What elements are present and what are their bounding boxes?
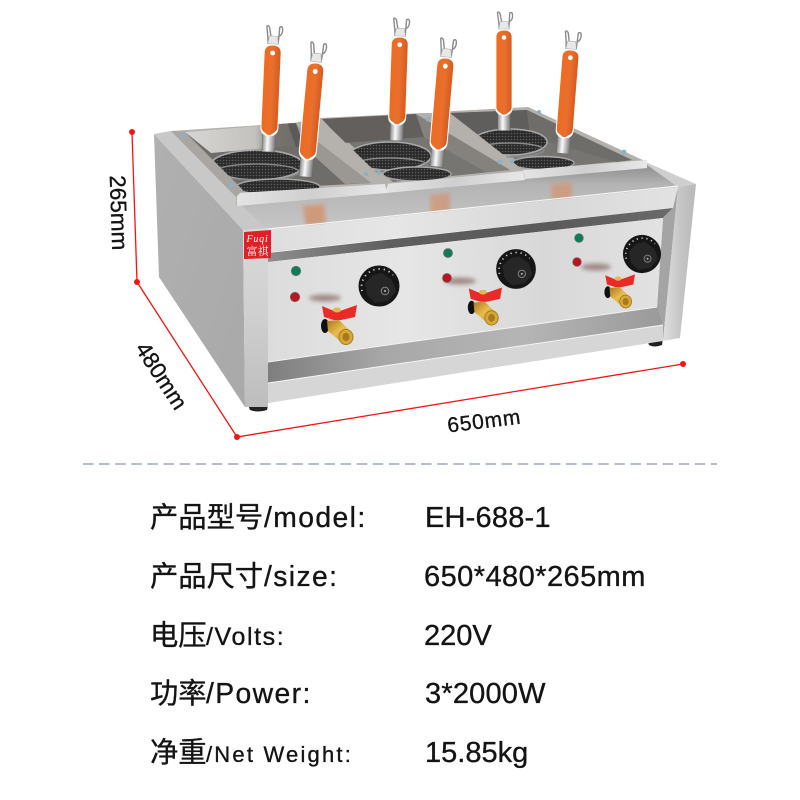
handle 5 [495, 12, 513, 131]
foot left [248, 405, 268, 412]
left column [243, 228, 268, 407]
lower dark band [268, 307, 663, 383]
spec row: net weight: 净重 [150, 736, 207, 768]
indicator lights [290, 234, 583, 302]
product: noodle cooker [154, 12, 696, 412]
spec row: volts: /Volts: [206, 623, 285, 651]
panel reflections [309, 264, 611, 302]
front control panel [268, 218, 663, 362]
foot right [647, 338, 663, 346]
valve 3 [604, 274, 635, 308]
front sloped surface [236, 165, 678, 230]
label: depth 480mm: 480mm [130, 338, 192, 414]
basket [349, 142, 431, 170]
spec row: power [150, 677, 546, 710]
logo: Fuqi: Fuqi [245, 234, 269, 245]
logo: Fuqi [244, 230, 271, 259]
handle 2 [296, 42, 327, 178]
dark band [268, 208, 673, 262]
top surface left [154, 131, 268, 230]
basket [473, 129, 547, 155]
pan 3 right [436, 107, 647, 179]
spec row: volts [150, 619, 492, 652]
knob 2 [496, 249, 536, 289]
spec row: power: 3*2000W [425, 678, 546, 710]
handle 6 [554, 31, 581, 154]
spec row: volts: 220V [424, 620, 492, 652]
spec row: volts: 电压 [150, 619, 207, 651]
handle 3 [387, 18, 410, 141]
valve 2 [468, 287, 502, 325]
right column [663, 184, 696, 341]
spec row: size [150, 560, 646, 593]
upper front strip [243, 187, 678, 252]
spec row: model: EH-688-1 [425, 502, 551, 534]
spec row: model [150, 501, 551, 534]
valve 1 [321, 305, 357, 344]
spec row: size: 产品尺寸 [150, 560, 263, 592]
label: width 650mm: 650mm [446, 406, 522, 437]
dimension lines [129, 129, 686, 440]
logo: Fuqi: 富祺 [246, 243, 269, 259]
spec row: power: /Power: [206, 677, 312, 709]
knob 1 [358, 266, 400, 306]
pan 1 left [171, 118, 388, 206]
spec row: size: 650*480*265mm [424, 561, 646, 593]
knob 3 [623, 235, 661, 273]
divider [83, 463, 717, 465]
handle 1 [259, 25, 283, 152]
spec row: size: /size: [264, 560, 338, 592]
spec row: net weight [150, 736, 528, 769]
spec row: model: 产品型号 [150, 501, 263, 533]
handle 4 [428, 38, 457, 168]
spec row: net weight: 15.85kg [425, 737, 528, 769]
pan 2 middle [313, 113, 525, 193]
spec row: net weight: /Net Weight: [206, 742, 353, 767]
bottom strip [268, 325, 663, 403]
spec row: power: 功率 [150, 677, 207, 709]
label: height 265mm: 265mm [105, 175, 132, 251]
side panel [154, 134, 245, 407]
right inner frame [657, 187, 678, 341]
spec row: model: /model: [264, 501, 367, 533]
basket [211, 150, 303, 180]
top surface right [640, 160, 696, 187]
